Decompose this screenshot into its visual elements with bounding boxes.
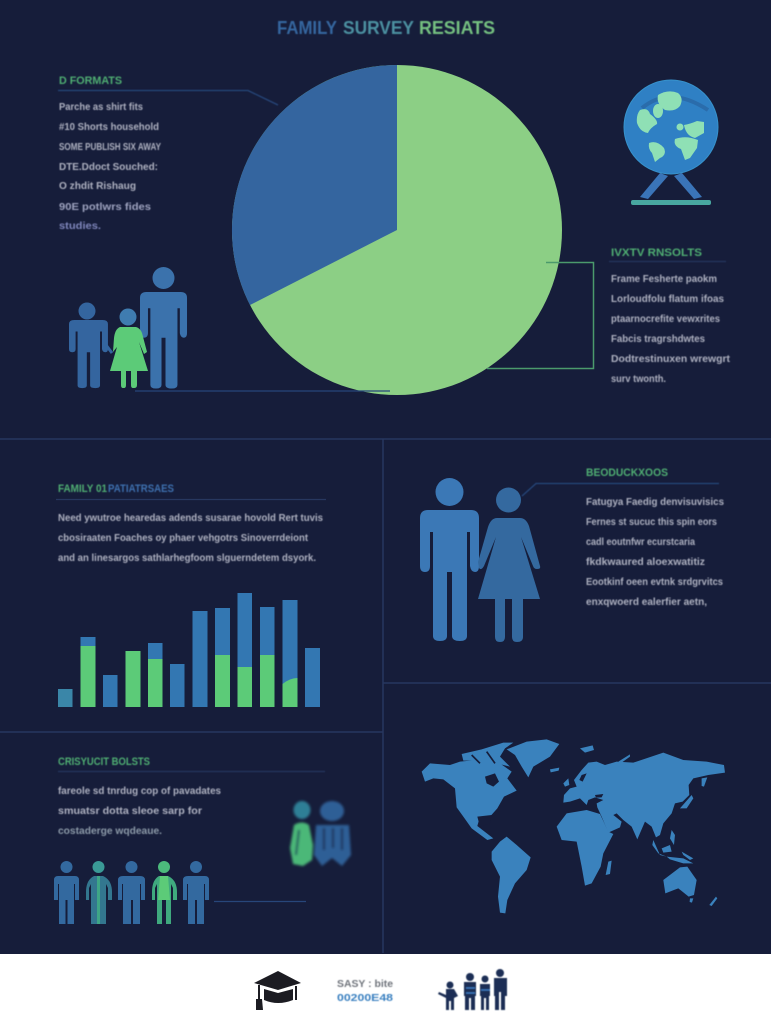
icon: globe on stand (624, 80, 718, 205)
text block: lower-left: fareole sd tnrdug cop of pavadates (58, 786, 221, 797)
text block: bar chart: cbosiraaten Foaches oy phaer vehgotrs Sinoverrdeiont (58, 533, 309, 544)
text block: top-right: Fabcis tragrshdwtes (611, 334, 705, 345)
text block: top-right (611, 274, 731, 385)
panel: lower-left text (58, 756, 325, 837)
title (277, 18, 495, 38)
text block: top-right: surv twonth. (611, 374, 666, 385)
title: SURVEY (343, 18, 414, 38)
icon: footer family (438, 969, 507, 1010)
text block: top-right: Frame Fesherte paokm (611, 274, 717, 285)
text block: top-left: SOME PUBLISH SIX AWAY (59, 142, 161, 153)
panel: couple text (522, 467, 724, 608)
text block: top-left: studies. (59, 221, 101, 232)
text block: top-right: Dodtrestinuxen wrewgrt (611, 354, 731, 365)
text block: couple: Fatugya Faedig denvisuvisics (586, 497, 724, 508)
heading: lower-left: CRISYUCIT BOLSTS (58, 756, 150, 768)
title: RESIATS (419, 18, 495, 38)
footer label: 00200E48 (337, 993, 394, 1004)
footer label: SASY : bite (337, 979, 393, 990)
text block: lower-left: costaderge wqdeaue. (58, 826, 162, 837)
icon: graduation cap (254, 971, 301, 1010)
panel: footer (0, 954, 771, 1024)
heading: bar chart: PATIATRSAES (108, 483, 174, 495)
panel: top-right text (609, 247, 731, 385)
text block: couple: enxqwoerd ealerfier aetn, (586, 597, 707, 608)
icon: couple (420, 478, 540, 642)
text block: top-left (59, 102, 161, 232)
text block: bar chart: Need ywutroe hearedas adends susarae hovold Rert tuvis (58, 513, 323, 524)
text block: top-right: Lorloudfolu flatum ifoas (611, 294, 724, 305)
icon: blurred family group (290, 801, 351, 866)
heading: top-right: IVXTV RNSOLTS (611, 247, 702, 259)
text block: lower-left: smuatsr dotta sleoe sarp for (58, 806, 202, 817)
text block: top-left: Parche as shirt fits (59, 102, 143, 113)
text block: couple (586, 497, 724, 608)
callout connector: pie to text (487, 262, 594, 368)
icon: row of five people (54, 861, 209, 924)
text block: top-left: DTE.Ddoct Souched: (59, 162, 158, 173)
text block: couple: fkdkwaured aloexwatitiz (586, 557, 705, 568)
text block: top-right: ptaarnocrefite vewxrites (611, 314, 720, 325)
heading: bar chart: FAMILY 01 (58, 483, 107, 495)
text block: bar chart: and an linesargos sathlarhegfoom slguerndetem dsyork. (58, 553, 316, 564)
map: world (422, 739, 725, 913)
panel: top-left text (58, 75, 278, 232)
text block: couple: cadl eoutnfwr ecurstcaria (586, 537, 695, 548)
heading: top-left: D FORMATS (59, 75, 122, 87)
icon: family of three (69, 267, 187, 389)
pie chart (232, 65, 562, 395)
panel: bar chart section (56, 483, 326, 707)
text block: top-left: #10 Shorts household (59, 122, 159, 133)
bar chart (58, 593, 320, 707)
title: FAMILY (277, 18, 337, 38)
text block: couple: Eootkinf oeen evtnk srdgrvitcs (586, 577, 723, 588)
heading: couple: BEODUCKXOOS (586, 467, 668, 479)
heading: bar chart (58, 483, 174, 495)
text block: top-left: 90E potlwrs fides (59, 202, 151, 213)
text block: top-left: O zhdit Rishaug (59, 181, 136, 192)
footer label (337, 979, 394, 1004)
text block: lower-left (58, 786, 221, 837)
text block: bar chart (58, 513, 323, 564)
text block: couple: Fernes st sucuc this spin eors (586, 517, 717, 528)
